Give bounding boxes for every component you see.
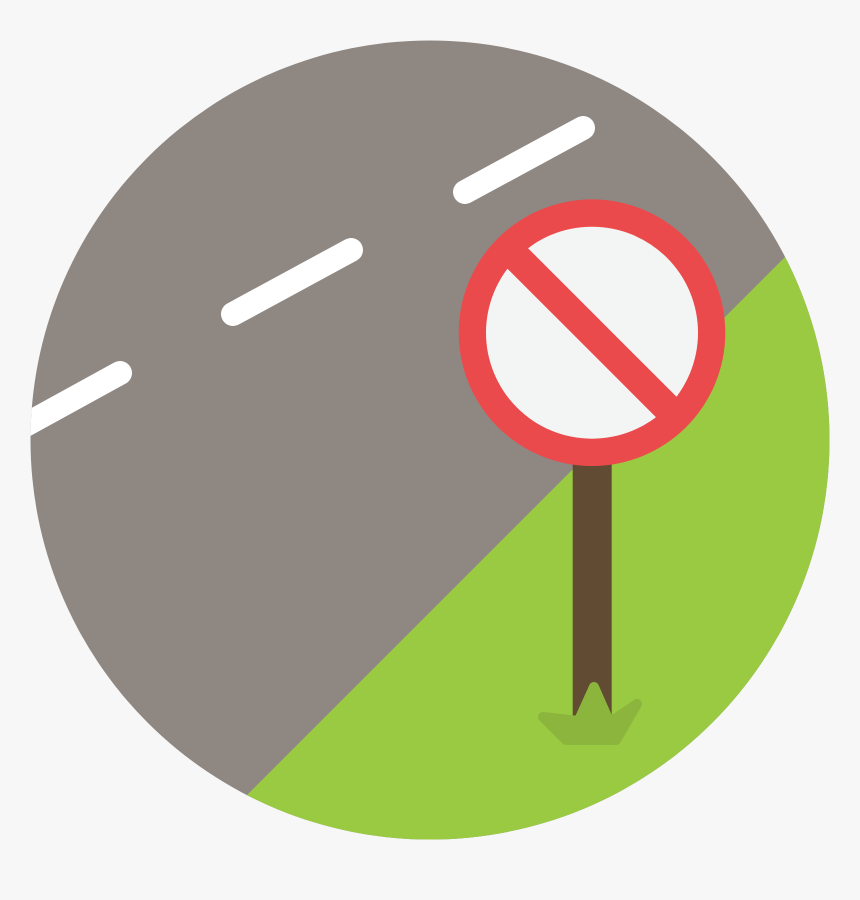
road lane markings	[0, 128, 583, 439]
grass tuft	[543, 687, 637, 740]
sign red ring	[459, 199, 725, 466]
sign white face	[486, 227, 698, 439]
prohibition sign	[459, 199, 725, 466]
grass verge	[246, 257, 830, 840]
sign diagonal bar	[510, 251, 674, 415]
sign post	[573, 450, 612, 720]
